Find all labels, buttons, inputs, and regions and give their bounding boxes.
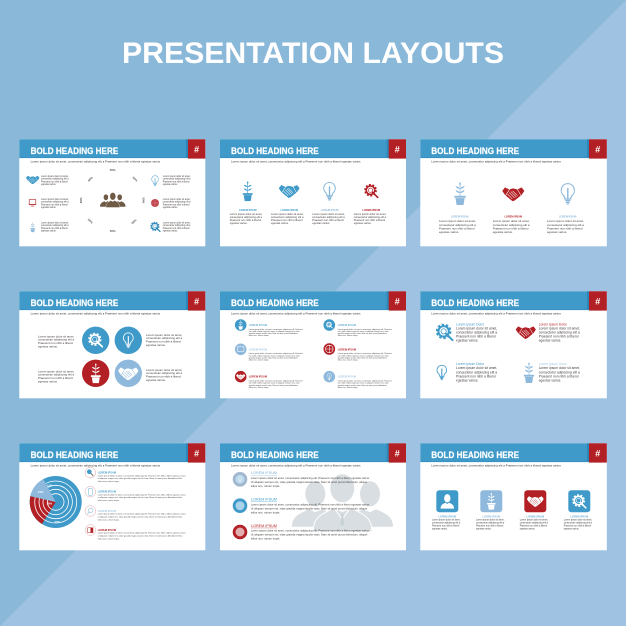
column text: Lorem ipsum dolor sit amet, bbox=[493, 219, 530, 223]
column text: Lorem ipsum dolor sit amet, bbox=[354, 213, 386, 216]
list text bbox=[251, 471, 370, 541]
text: handshake item: egestas varius. bbox=[539, 339, 561, 343]
icon: plant bbox=[454, 182, 466, 205]
icon: gear circle bbox=[82, 327, 109, 354]
right text blocks: Lorem ipsum dolor sit amet, bbox=[163, 176, 190, 178]
heading: BOLD HEADING HERE bbox=[431, 146, 519, 156]
column labels: LOREM IPSUM bbox=[559, 215, 577, 218]
column text: consectetur adipiscing elit a bbox=[230, 215, 263, 219]
list text: Lorem ipsum dolor sit amet, consectetur adipiscing elit. Praesent non nibh a libero egestas varius. bbox=[251, 503, 370, 506]
left list text: LOREM IPSUM bbox=[249, 323, 267, 327]
subheading: Lorem ipsum dolor sit amet, consectetur adipiscing elit a Praesent non nibh a liberol egestas varius bbox=[431, 160, 562, 164]
right list text: LOREM IPSUM bbox=[338, 347, 356, 351]
tile labels: LOREM IPSUM bbox=[438, 515, 456, 518]
column text: consectetur adipiscing elit a bbox=[439, 223, 476, 227]
text: plant item: Lorem Ipsum Dolor bbox=[539, 362, 568, 366]
left text: Praesent non nibh a liberol bbox=[38, 376, 73, 380]
icon: people bbox=[100, 193, 126, 207]
left text blocks: Praesent non nibh a liberol bbox=[41, 180, 68, 183]
list text: LOREM IPSUM bbox=[98, 509, 116, 513]
text: bulb item: consectetur adipiscing elit a bbox=[456, 370, 497, 374]
right text blocks: Lorem ipsum dolor sit amet, bbox=[163, 199, 190, 201]
panel: slide 6, four large icons with text bbox=[420, 291, 607, 398]
left list text: LOREM IPSUM bbox=[249, 347, 267, 351]
subheading: Lorem ipsum dolor sit amet, consectetur adipiscing elit a Praesent non nibh a liberol egestas varius bbox=[231, 311, 361, 315]
icon: light badge bbox=[233, 472, 247, 487]
text: plant item bbox=[539, 362, 580, 383]
icon: gear bbox=[437, 325, 452, 340]
tile labels bbox=[438, 515, 588, 518]
icon: red badge bbox=[233, 525, 247, 539]
right list text: LOREM IPSUM bbox=[338, 375, 356, 379]
list text: LOREM IPSUM bbox=[251, 471, 277, 475]
icon: magnifier badge bbox=[85, 467, 96, 478]
right text: Praesent non nibh a liberol bbox=[146, 375, 181, 379]
left text blocks: Praesent non nibh a liberol bbox=[41, 227, 68, 230]
text: handshake item: Lorem Ipsum Dolor bbox=[539, 323, 568, 327]
icon: gear bbox=[151, 222, 160, 232]
slide number: # bbox=[595, 297, 600, 307]
percent labels bbox=[79, 168, 146, 233]
pie chart: 18% bbox=[46, 501, 53, 505]
text: bulb item: Lorem Ipsum Dolor bbox=[456, 362, 485, 366]
column text: consectetur adipiscing elit a bbox=[354, 215, 387, 219]
left text blocks: egestas varius. bbox=[41, 206, 57, 209]
text: bulb item bbox=[456, 362, 497, 383]
left list text: Lorem ipsum dolor sit amet, consectetur adipiscing elit. Praesent bbox=[249, 329, 303, 331]
subheading: Lorem ipsum dolor sit amet, consectetur adipiscing elit a Praesent non nibh a liberol egestas varius bbox=[231, 463, 361, 467]
list text: tellus non, rutrum turpis. bbox=[251, 537, 280, 541]
right text: Lorem ipsum dolor sit amet, bbox=[146, 368, 182, 372]
left list text: gravida magna iaculis vitae, Nam sit amet purus bibendum bbox=[249, 384, 298, 387]
list text: LOREM IPSUM bbox=[98, 471, 116, 475]
slide number: # bbox=[194, 449, 199, 459]
tile text: egestas varius. bbox=[520, 527, 536, 530]
tile labels: LOREM IPSUM bbox=[526, 515, 544, 518]
text: handshake item bbox=[539, 323, 580, 343]
right list text bbox=[338, 323, 392, 389]
text: plant item: Praesent non nibh a liberol bbox=[539, 374, 579, 378]
pie chart: 15% bbox=[47, 483, 53, 487]
slide number: # bbox=[194, 297, 199, 307]
people silhouette bbox=[292, 474, 393, 532]
right text blocks: consectetur adipiscing elit a bbox=[163, 224, 191, 227]
left list text: LOREM IPSUM bbox=[249, 375, 267, 379]
list text: ut aliquam semper est, vitae gravida magna iaculis vitae. Nam sit amet purus bibendum tellus bbox=[98, 534, 182, 537]
column labels: LOREM IPSUM bbox=[321, 209, 339, 212]
tile text: Praesent non nibh a liberol bbox=[564, 524, 592, 527]
tile text: Lorem ipsum dolor sit amet, bbox=[564, 519, 592, 521]
tile text: consectetur adipiscing elit a bbox=[520, 521, 549, 524]
column text: consectetur adipiscing elit a bbox=[493, 223, 530, 227]
icon: person tile bbox=[436, 490, 458, 512]
icon: bulb bbox=[437, 365, 447, 380]
column text: egestas varius. bbox=[547, 230, 567, 234]
left list text: gravida magna iaculis vitae, Nam sit amet purus bibendum bbox=[249, 332, 298, 335]
slide number: # bbox=[595, 449, 600, 459]
column labels: LOREM IPSUM bbox=[362, 209, 380, 212]
right list text: non nibh a libero egestas varius ut aliquam semper est, vitae bbox=[338, 330, 389, 333]
panel: slide 9, four square icons bbox=[420, 443, 607, 550]
right list text: Lorem ipsum dolor sit amet, consectetur adipiscing elit. Praesent bbox=[338, 329, 392, 331]
right list text: gravida magna iaculis vitae, Nam sit amet purus bibendum bbox=[338, 384, 387, 387]
list text: ut aliquam semper est, vitae gravida magna iaculis vitae. Nam sit amet purus bibendum tellus bbox=[98, 477, 182, 480]
pie chart bbox=[30, 476, 82, 528]
left list text: Lorem ipsum dolor sit amet, consectetur adipiscing elit. Praesent bbox=[249, 353, 303, 355]
right list text: gravida magna iaculis vitae, Nam sit amet purus bibendum bbox=[338, 356, 387, 359]
column text: Praesent non nibh a liberol bbox=[354, 218, 386, 222]
slide number: # bbox=[395, 297, 400, 307]
icon: book badge bbox=[85, 525, 96, 535]
left text blocks: Lorem ipsum dolor sit amet, bbox=[41, 176, 69, 178]
tile text: egestas varius. bbox=[432, 527, 448, 530]
right list text: non nibh a libero egestas varius ut aliquam semper est, vitae bbox=[338, 382, 389, 385]
list text: LOREM IPSUM bbox=[251, 497, 277, 501]
text: gear item bbox=[456, 323, 497, 343]
subheading: Lorem ipsum dolor sit amet, consectetur adipiscing elit a Praesent non nibh a liberol egestas varius bbox=[31, 463, 161, 467]
right text blocks: consectetur adipiscing elit a bbox=[163, 178, 191, 181]
right text blocks: Praesent non nibh a liberol bbox=[163, 203, 190, 206]
icon: plant badge bbox=[235, 319, 246, 331]
icon: monitor bbox=[29, 200, 36, 206]
icon: phone badge bbox=[85, 486, 96, 497]
icon: monitor badge bbox=[235, 344, 246, 355]
list text: tellus non, rutrum turpis. bbox=[98, 537, 120, 540]
icon: plant bbox=[30, 222, 35, 232]
tile text: consectetur adipiscing elit a bbox=[476, 521, 505, 524]
list text: tellus non, rutrum turpis. bbox=[98, 499, 120, 502]
right text blocks: Praesent non nibh a liberol bbox=[163, 227, 190, 230]
right text: Lorem ipsum dolor sit amet, bbox=[146, 333, 182, 337]
icon: gear badge bbox=[324, 319, 335, 331]
left text blocks: Lorem ipsum dolor sit amet, bbox=[41, 222, 69, 224]
icon: plant circle bbox=[82, 360, 109, 387]
right text: egestas varius. bbox=[146, 378, 166, 382]
column text: egestas varius. bbox=[493, 230, 513, 234]
column text bbox=[230, 212, 387, 225]
left text blocks: Lorem ipsum dolor sit amet, bbox=[41, 199, 69, 201]
text: handshake item: consectetur adipiscing elit a bbox=[539, 331, 580, 335]
icon: plant bbox=[524, 362, 534, 383]
list text: Lorem ipsum dolor sit amet, consectetur adipiscing elit. Praesent non nibh a libero egestas varius bbox=[98, 533, 186, 535]
text: gear item: consectetur adipiscing elit a bbox=[456, 331, 497, 335]
left text blocks: consectetur adipiscing elit a bbox=[41, 178, 69, 181]
tile text: Lorem ipsum dolor sit amet, bbox=[520, 519, 548, 521]
text: gear item: egestas varius. bbox=[456, 339, 479, 343]
icon: bulb bbox=[324, 182, 335, 201]
right list text: tellus non, rutrum turpis. bbox=[338, 359, 358, 362]
right text blocks bbox=[163, 175, 191, 233]
panel: slide 7, ring pie chart with list bbox=[19, 443, 205, 550]
icon: plant tile bbox=[480, 490, 502, 512]
right text bbox=[146, 333, 182, 382]
title: PRESENTATION LAYOUTS bbox=[122, 37, 504, 70]
slide number: # bbox=[595, 145, 600, 155]
tile text: Praesent non nibh a liberol bbox=[432, 524, 460, 527]
column text bbox=[439, 219, 584, 234]
tile text: consectetur adipiscing elit a bbox=[432, 521, 461, 524]
heading: BOLD HEADING HERE bbox=[231, 298, 319, 308]
list text: Lorem ipsum dolor sit amet, consectetur adipiscing elit. Praesent non nibh a libero egestas varius bbox=[98, 475, 186, 477]
column text: egestas varius. bbox=[271, 221, 289, 225]
column text: Lorem ipsum dolor sit amet, bbox=[439, 219, 476, 223]
column text: Lorem ipsum dolor sit amet, bbox=[230, 213, 262, 216]
tile text: egestas varius. bbox=[476, 527, 492, 530]
column text: Praesent non nibh a liberol bbox=[493, 227, 529, 231]
list text: LOREM IPSUM bbox=[251, 524, 277, 528]
list text: ut aliquam semper est, vitae gravida magna iaculis vitae. Nam sit amet purus bibendum tellus bbox=[98, 515, 182, 518]
list text: tellus non, rutrum turpis. bbox=[98, 518, 120, 521]
right text blocks: egestas varius. bbox=[163, 230, 178, 233]
left text: Lorem ipsum dolor sit amet, bbox=[38, 369, 74, 373]
right list text: gravida magna iaculis vitae, Nam sit amet purus bibendum bbox=[338, 332, 387, 335]
percent labels: 50% bbox=[110, 168, 116, 172]
left text: consectetur adipiscing elit a bbox=[38, 338, 74, 342]
left list text: gravida magna iaculis vitae, Nam sit amet purus bibendum bbox=[249, 356, 298, 359]
right list text: Lorem ipsum dolor sit amet, consectetur adipiscing elit. Praesent bbox=[338, 353, 392, 355]
tile text bbox=[432, 518, 593, 530]
text: gear item: Lorem Ipsum Dolor bbox=[456, 323, 485, 327]
text: handshake item: Praesent non nibh a liberol bbox=[539, 335, 579, 339]
right list text: Lorem ipsum dolor sit amet, consectetur adipiscing elit. Praesent bbox=[338, 380, 392, 382]
subheading: Lorem ipsum dolor sit amet, consectetur adipiscing elit a Praesent non nibh a liberol egestas varius bbox=[231, 160, 361, 164]
panel: slide 3, three icon columns bbox=[420, 139, 607, 246]
list text: LOREM IPSUM bbox=[98, 528, 116, 532]
list text: tellus non, rutrum turpis. bbox=[251, 484, 280, 488]
text: bulb item: Praesent non nibh a liberol bbox=[456, 374, 496, 378]
percent labels: 50% bbox=[79, 197, 83, 203]
list text: Lorem ipsum dolor sit amet, consectetur adipiscing elit. Praesent non nibh a libero egestas varius bbox=[98, 514, 186, 516]
tile text: egestas varius. bbox=[564, 527, 580, 530]
column text: egestas varius. bbox=[354, 221, 372, 225]
column labels: LOREM IPSUM bbox=[504, 215, 522, 218]
left text: Lorem ipsum dolor sit amet, bbox=[38, 334, 74, 338]
heading: BOLD HEADING HERE bbox=[231, 450, 319, 460]
column text: Praesent non nibh a liberol bbox=[230, 218, 262, 222]
list text: tellus non, rutrum turpis. bbox=[251, 510, 280, 514]
slide number: # bbox=[194, 145, 199, 155]
icon: gear tile bbox=[568, 490, 590, 512]
list text: tellus non, rutrum turpis. bbox=[98, 480, 120, 483]
tile labels: LOREM IPSUM bbox=[570, 515, 588, 518]
right text: consectetur adipiscing elit a bbox=[146, 336, 182, 340]
column text: Lorem ipsum dolor sit amet, bbox=[547, 219, 584, 223]
left list text: non nibh a libero egestas varius ut aliquam semper est, vitae bbox=[249, 354, 300, 357]
column text: egestas varius. bbox=[439, 230, 459, 234]
text: plant item: consectetur adipiscing elit a bbox=[539, 370, 580, 374]
tile text: Praesent non nibh a liberol bbox=[476, 524, 504, 527]
icon: bulb bbox=[152, 176, 158, 186]
list text: Lorem ipsum dolor sit amet, consectetur adipiscing elit. Praesent non nibh a libero egestas varius bbox=[98, 494, 186, 496]
panel: slide 2, four icon columns bbox=[220, 139, 406, 246]
icon: handshake tile bbox=[524, 490, 546, 512]
left list text: non nibh a libero egestas varius ut aliquam semper est, vitae bbox=[249, 382, 300, 385]
subheading: Lorem ipsum dolor sit amet, consectetur adipiscing elit a Praesent non nibh a liberol egestas varius bbox=[31, 311, 161, 315]
list text: LOREM IPSUM bbox=[98, 490, 116, 494]
column text: consectetur adipiscing elit a bbox=[547, 223, 584, 227]
list text: Ut aliquam semper est, vitae gravida magna iaculis vitae. Nam sit amet purus bibendum, aliquet bbox=[251, 480, 368, 484]
percent labels: 50% bbox=[130, 218, 138, 225]
right text: Praesent non nibh a liberol bbox=[146, 340, 181, 344]
icon: handshake badge bbox=[235, 371, 246, 382]
tile labels: LOREM IPSUM bbox=[482, 515, 500, 518]
icon: handshake circle bbox=[115, 360, 142, 387]
text: plant item: egestas varius. bbox=[539, 379, 561, 383]
left text blocks: egestas varius. bbox=[41, 183, 57, 186]
column text: Praesent non nibh a liberol bbox=[312, 218, 344, 222]
list text: Lorem ipsum dolor sit amet, consectetur adipiscing elit. Praesent non nibh a libero egestas varius. bbox=[251, 530, 370, 533]
slide number: # bbox=[395, 145, 400, 155]
subheading: Lorem ipsum dolor sit amet, consectetur adipiscing elit a Praesent non nibh a liberol egestas varius bbox=[431, 463, 562, 467]
right text: egestas varius. bbox=[146, 343, 166, 347]
panel: slide 8, list over people silhouette bbox=[220, 443, 406, 550]
left text blocks bbox=[41, 175, 69, 233]
icon: handshake bbox=[26, 176, 40, 184]
tile text: Lorem ipsum dolor sit amet, bbox=[432, 519, 460, 521]
panel: slide 1, six items around people icon bbox=[19, 139, 205, 246]
left list text: Lorem ipsum dolor sit amet, consectetur adipiscing elit. Praesent bbox=[249, 380, 303, 382]
column text: Praesent non nibh a liberol bbox=[439, 227, 475, 231]
column text: Praesent non nibh a liberol bbox=[547, 227, 583, 231]
column labels bbox=[239, 209, 380, 212]
pie chart: 15% bbox=[38, 490, 44, 494]
text: handshake item: Lorem ipsum dolor sit amet, bbox=[539, 327, 580, 331]
column labels: LOREM IPSUM bbox=[451, 215, 469, 218]
pie chart: 50% bbox=[54, 520, 61, 524]
left list text: tellus non, rutrum turpis. bbox=[249, 334, 269, 337]
icon: search badge bbox=[85, 506, 96, 516]
text: gear item: Lorem ipsum dolor sit amet, bbox=[456, 327, 497, 331]
list text: Lorem ipsum dolor sit amet, consectetur adipiscing elit. Praesent non nibh a libero egestas varius. bbox=[251, 477, 370, 480]
left text: egestas varius. bbox=[38, 344, 58, 348]
right text: consectetur adipiscing elit a bbox=[146, 371, 182, 375]
column text: consectetur adipiscing elit a bbox=[312, 215, 345, 219]
column labels bbox=[451, 215, 577, 218]
list text: Ut aliquam semper est, vitae gravida magna iaculis vitae. Nam sit amet purus bibendum, aliquet bbox=[251, 533, 368, 537]
left list text: non nibh a libero egestas varius ut aliquam semper est, vitae bbox=[249, 330, 300, 333]
icon: handshake bbox=[502, 187, 524, 201]
list text: ut aliquam semper est, vitae gravida magna iaculis vitae. Nam sit amet purus bibendum tellus bbox=[98, 496, 182, 499]
left list text: tellus non, rutrum turpis. bbox=[249, 359, 269, 362]
icon: bulb circle bbox=[115, 327, 142, 354]
left text blocks: consectetur adipiscing elit a bbox=[41, 201, 69, 204]
right list text: tellus non, rutrum turpis. bbox=[338, 386, 358, 389]
text: gear item: Praesent non nibh a liberol bbox=[456, 335, 496, 339]
heading: BOLD HEADING HERE bbox=[431, 298, 519, 308]
column labels: LOREM IPSUM bbox=[239, 209, 257, 212]
right text blocks: egestas varius. bbox=[163, 206, 178, 209]
icon: bulb badge bbox=[324, 371, 335, 382]
tile text: Lorem ipsum dolor sit amet, bbox=[476, 519, 504, 521]
left text blocks: egestas varius. bbox=[41, 230, 57, 233]
percent labels: 50% bbox=[142, 197, 146, 204]
heading: BOLD HEADING HERE bbox=[31, 298, 118, 308]
right text blocks: consectetur adipiscing elit a bbox=[163, 201, 191, 204]
heading: BOLD HEADING HERE bbox=[231, 146, 319, 156]
left list text: tellus non, rutrum turpis. bbox=[249, 386, 269, 389]
icon: gear bbox=[365, 185, 378, 197]
tile text: consectetur adipiscing elit a bbox=[564, 521, 593, 524]
slide number: # bbox=[395, 449, 400, 459]
column text: Lorem ipsum dolor sit amet, bbox=[271, 213, 304, 216]
right list text: non nibh a libero egestas varius ut aliquam semper est, vitae bbox=[338, 354, 389, 357]
icon: bulb bbox=[561, 184, 574, 205]
panel: slide 5, six item list bbox=[220, 291, 406, 398]
icon: plant bbox=[243, 181, 253, 201]
left text: egestas varius. bbox=[38, 379, 58, 383]
percent labels: 50% bbox=[132, 176, 139, 183]
column labels: LOREM IPSUM bbox=[280, 209, 298, 212]
list text bbox=[98, 471, 186, 540]
column text: egestas varius. bbox=[312, 221, 330, 225]
right list text: tellus non, rutrum turpis. bbox=[338, 334, 358, 337]
panel: slide 4, four circles bbox=[19, 291, 205, 398]
subheading: Lorem ipsum dolor sit amet, consectetur adipiscing elit a Praesent non nibh a liberol egestas varius bbox=[431, 311, 562, 315]
column text: Praesent non nibh a liberol bbox=[271, 218, 303, 222]
icon: handshake bbox=[516, 326, 536, 339]
left text: Praesent non nibh a liberol bbox=[38, 341, 73, 345]
heading: BOLD HEADING HERE bbox=[31, 146, 118, 156]
icon: handshake bbox=[279, 185, 300, 198]
percent labels: 50% bbox=[110, 229, 116, 233]
text: bulb item: egestas varius. bbox=[456, 379, 479, 383]
icon: globe badge bbox=[324, 343, 335, 355]
left list text bbox=[249, 323, 303, 389]
heading: BOLD HEADING HERE bbox=[31, 450, 118, 460]
right text blocks: egestas varius. bbox=[163, 183, 178, 186]
list text: Ut aliquam semper est, vitae gravida magna iaculis vitae. Nam sit amet purus bibendum, aliquet bbox=[251, 506, 368, 510]
column text: consectetur adipiscing elit a bbox=[271, 215, 304, 219]
left text: consectetur adipiscing elit a bbox=[38, 373, 74, 377]
right list text: LOREM IPSUM bbox=[338, 323, 356, 327]
percent labels: 50% bbox=[87, 218, 94, 225]
percent labels: 50% bbox=[87, 175, 94, 183]
column text: egestas varius. bbox=[230, 221, 248, 225]
right text blocks: Lorem ipsum dolor sit amet, bbox=[163, 222, 190, 224]
subheading: Lorem ipsum dolor sit amet, consectetur adipiscing elit a Praesent non nibh a liberol egestas varius bbox=[31, 160, 161, 164]
icon: blue badge bbox=[233, 498, 247, 513]
text: plant item: Lorem ipsum dolor sit amet, bbox=[539, 366, 580, 370]
text: bulb item: Lorem ipsum dolor sit amet, bbox=[456, 366, 497, 370]
left text blocks: Praesent non nibh a liberol bbox=[41, 203, 68, 206]
heading: BOLD HEADING HERE bbox=[431, 450, 519, 460]
left text blocks: consectetur adipiscing elit a bbox=[41, 224, 69, 227]
right text blocks: Praesent non nibh a liberol bbox=[163, 180, 190, 183]
column text: Lorem ipsum dolor sit amet, bbox=[312, 213, 345, 216]
tile text: Praesent non nibh a liberol bbox=[520, 524, 548, 527]
left text bbox=[38, 334, 74, 384]
icon: globe bbox=[151, 199, 159, 207]
